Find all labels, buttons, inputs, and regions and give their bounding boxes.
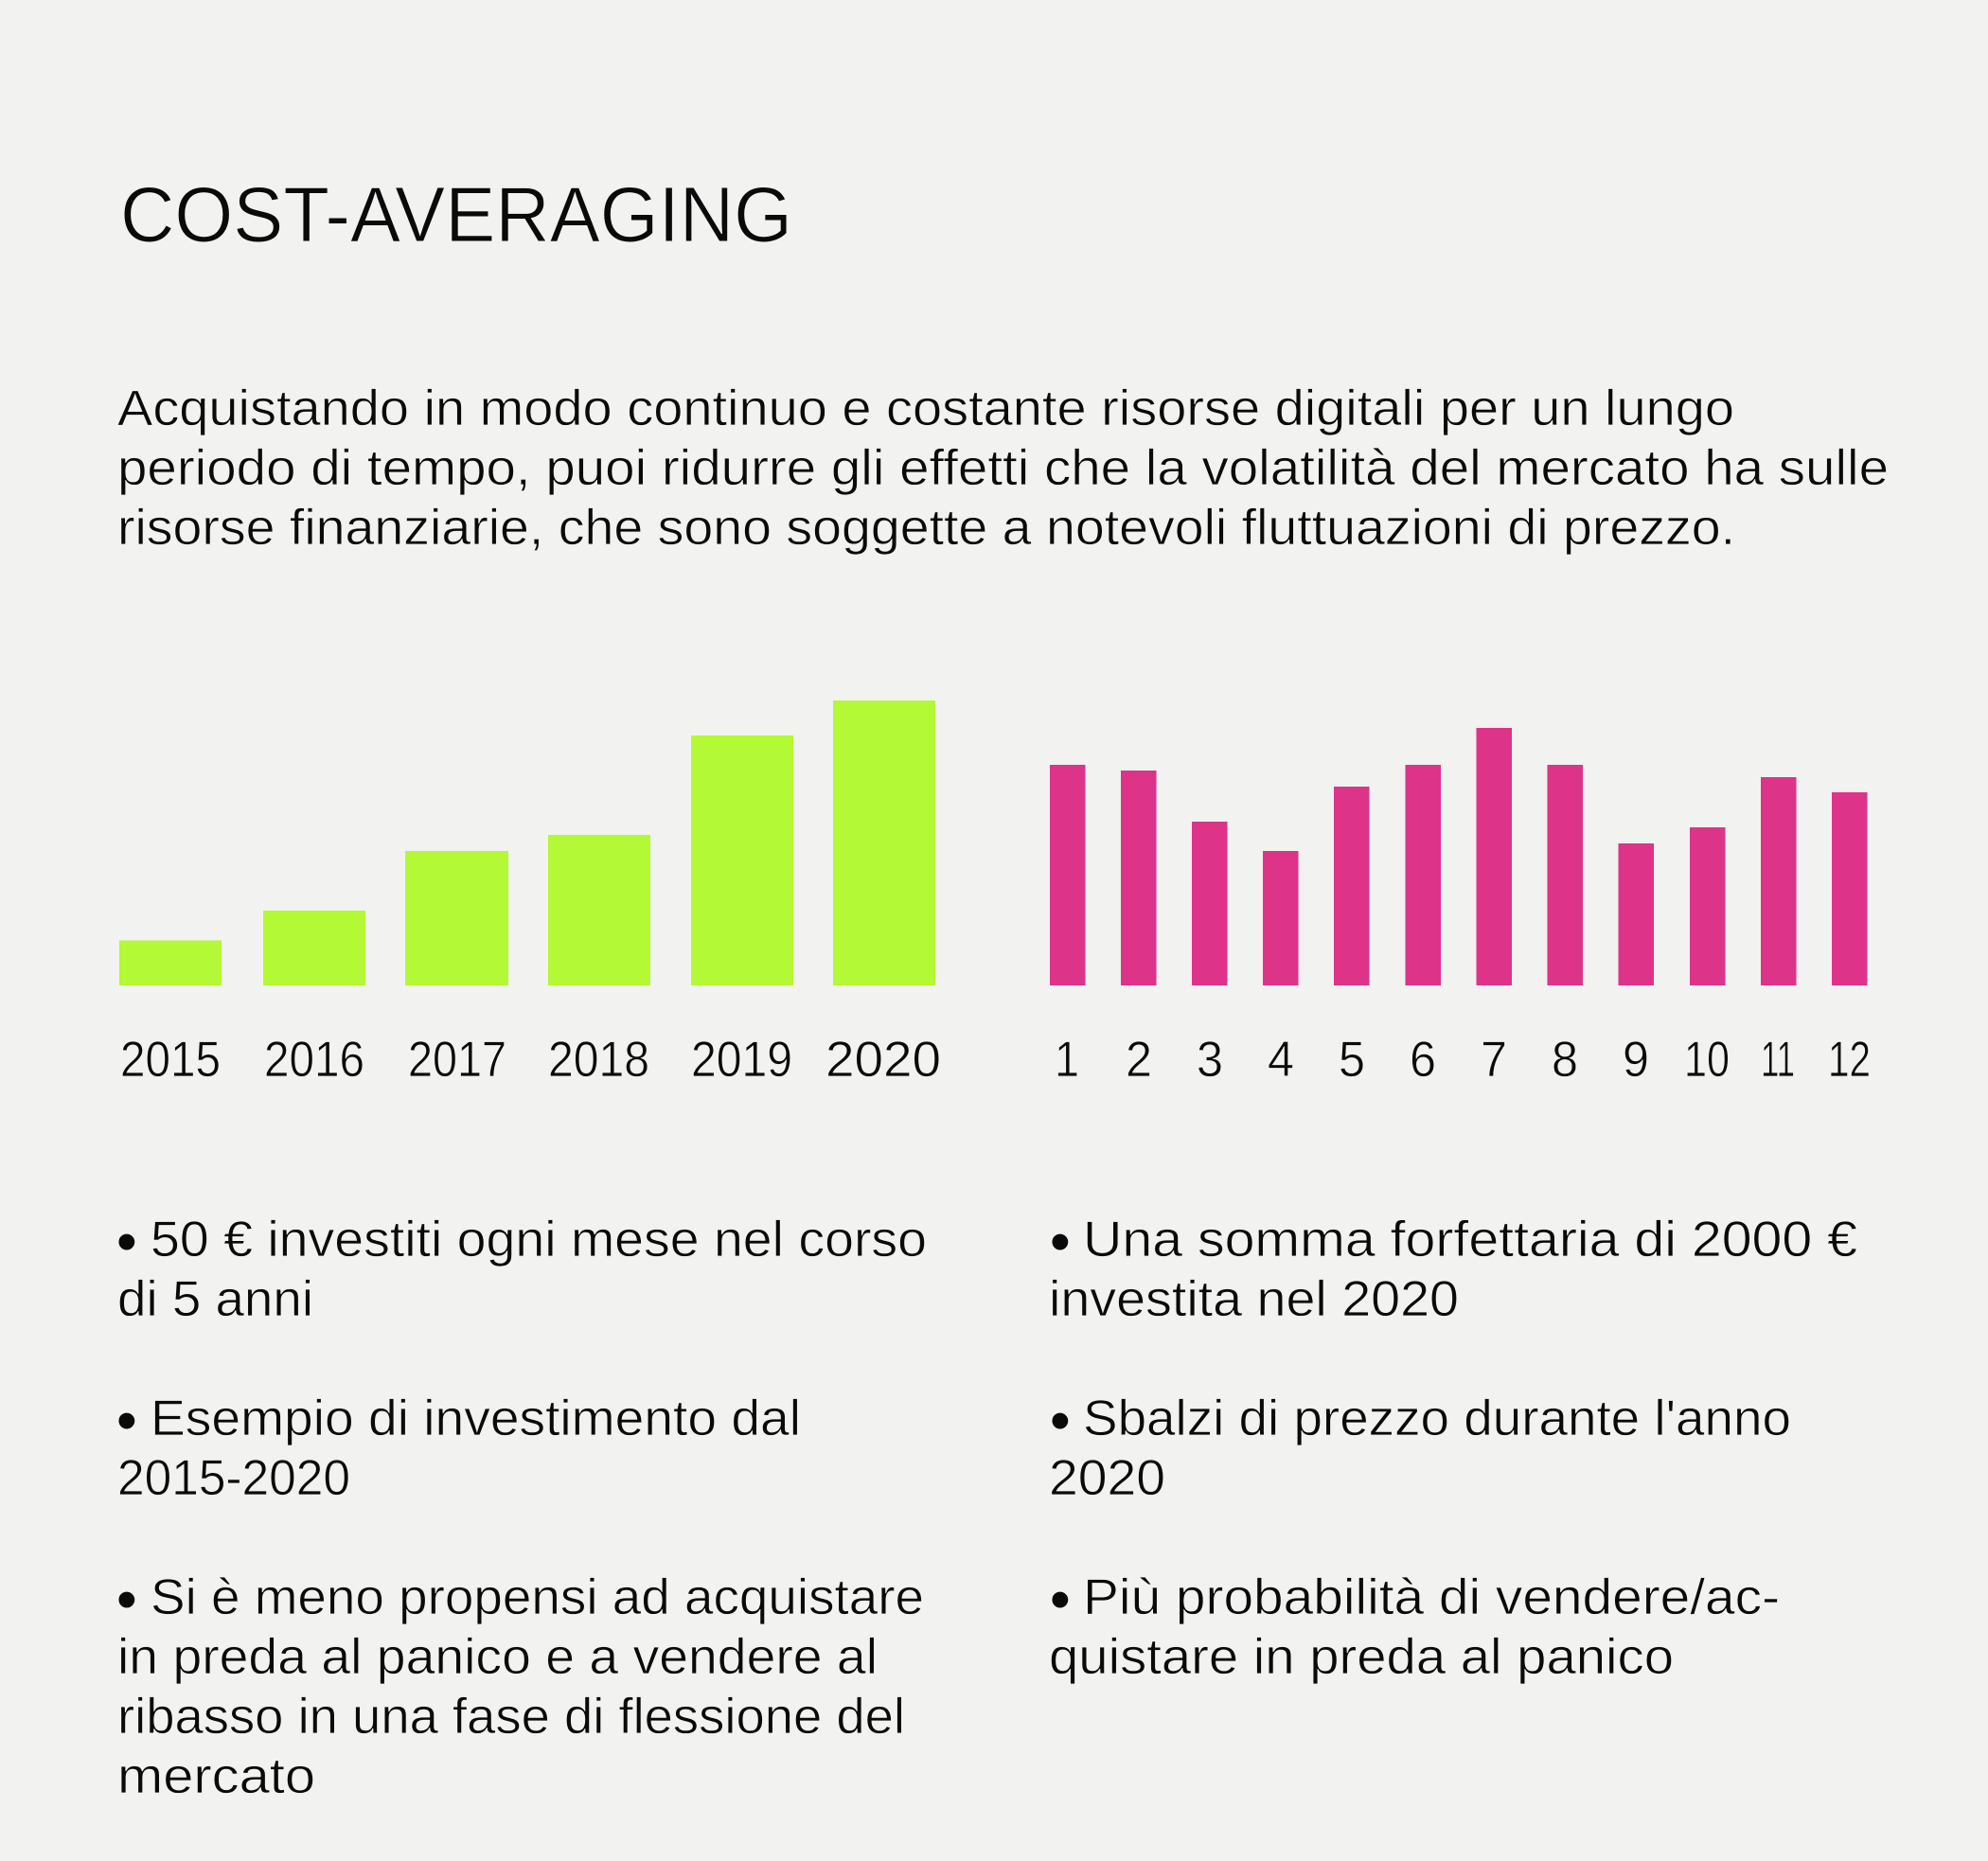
bar chart: yearly investment 2015-2020: 2015 [120,1032,221,1088]
bar chart: monthly prices 1-12 [1050,728,1871,1088]
bar chart: monthly prices 1-12: 6 [1410,1032,1436,1088]
intro paragraph: Acquistando in modo continuo e costante risorse digitali per un lungo [117,381,1734,436]
bullet point: price swings: • [1050,1388,1071,1454]
bar chart: monthly prices 1-12: 10 [1684,1032,1730,1088]
bullet point: 50 euro monthly: 50 € investiti ogni mese nel corso [151,1212,927,1267]
intro paragraph [117,381,1889,556]
bullet point: 50 euro monthly: • [116,1210,137,1274]
bullet point: example period: • [116,1388,137,1454]
bar chart: monthly prices 1-12: 5 [1339,1032,1365,1088]
bullet point: less panic: Si è meno propensi ad acquistare [151,1569,924,1625]
bar chart: monthly prices 1-12: 9 [1623,1032,1649,1088]
bullet point: example period: Esempio di investimento dal [151,1391,801,1446]
bullet point: less panic [116,1568,924,1804]
bar chart: monthly prices 1-12: 7 [1481,1032,1507,1088]
bullet point: lump sum [1049,1210,1857,1327]
bar chart: yearly investment 2015-2020 [119,700,941,1088]
bullet point: example period [116,1388,801,1506]
bar chart: monthly prices 1-12: 3 [1197,1032,1223,1088]
left list: cost-averaging points [116,1210,927,1804]
bullet point: price swings: 2020 [1049,1450,1165,1506]
bar chart: yearly investment 2015-2020: 2016 [264,1032,364,1088]
bar chart: monthly prices 1-12: 11 [1761,1032,1795,1088]
bar chart: yearly investment 2015-2020: 2020 [825,1032,941,1088]
intro paragraph: risorse finanziarie, che sono soggette a notevoli fluttuazioni di prezzo. [117,500,1735,556]
bullet point: example period: 2015-2020 [117,1450,350,1506]
bar chart: yearly investment 2015-2020: 2019 [691,1032,792,1088]
bullet point: price swings [1049,1388,1791,1506]
bullet point: less panic: ribasso in una fase di flessione del [117,1689,905,1745]
bullet point: more panic: • [1050,1568,1071,1632]
bullet point: less panic: mercato [117,1748,315,1804]
bar chart: monthly prices 1-12: 4 [1268,1032,1294,1088]
bullet point: 50 euro monthly: di 5 anni [117,1271,313,1327]
bullet point: less panic: in preda al panico e a vendere al [117,1629,878,1685]
bullet point: more panic: Più probabilità di vendere/ac- [1083,1569,1780,1625]
bullet point: lump sum: • [1050,1210,1071,1274]
bullet point: less panic: • [116,1568,137,1632]
bullet point: 50 euro monthly [116,1210,927,1327]
bar chart: monthly prices 1-12: 1 [1055,1032,1079,1088]
bullet point: more panic [1049,1568,1780,1685]
bar chart: monthly prices 1-12: 8 [1552,1032,1578,1088]
bullet point: price swings: Sbalzi di prezzo durante l'anno [1083,1391,1791,1446]
right list: lump-sum points [1049,1210,1857,1685]
bullet point: more panic: quistare in preda al panico [1049,1629,1674,1685]
bar chart: yearly investment 2015-2020: 2018 [548,1032,649,1088]
bar chart: monthly prices 1-12: 12 [1828,1032,1871,1088]
bullet point: lump sum: Una somma forfettaria di 2000 € [1083,1212,1857,1267]
title: COST-AVERAGING [120,170,792,258]
bar chart: monthly prices 1-12: 2 [1126,1032,1152,1088]
intro paragraph: periodo di tempo, puoi ridurre gli effetti che la volatilità del mercato ha sulle [117,440,1889,496]
bullet point: lump sum: investita nel 2020 [1049,1271,1459,1327]
bar chart: yearly investment 2015-2020: 2017 [408,1032,506,1088]
